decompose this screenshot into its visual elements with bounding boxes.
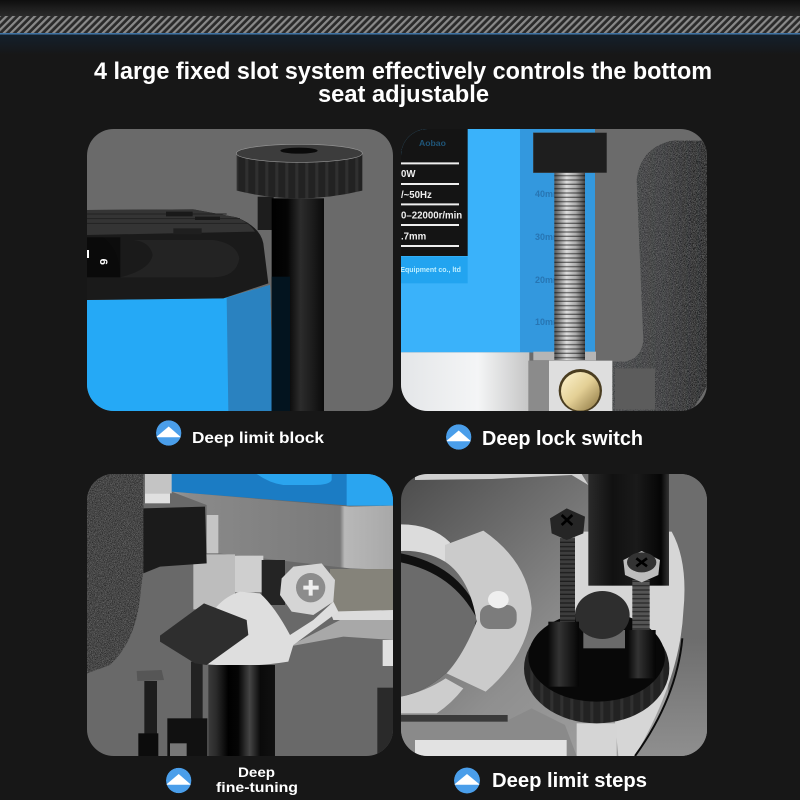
white strip bbox=[415, 474, 588, 485]
threaded screw bbox=[533, 172, 596, 360]
specification plate: /~50Hz bbox=[401, 190, 432, 201]
panel: deep limit block bbox=[87, 129, 393, 412]
blue body bbox=[170, 474, 393, 506]
specification plate: 0W bbox=[401, 169, 416, 180]
specification plate: Aobao bbox=[419, 138, 446, 148]
caption: deep limit steps: Deep limit steps bbox=[492, 770, 647, 792]
blue body bbox=[401, 129, 595, 352]
caption: deep fine-tuning: Deep bbox=[238, 765, 275, 780]
lock nut bbox=[280, 563, 335, 615]
specification plate: Equipment co., ltd bbox=[400, 267, 461, 274]
icon: blue circle with white triangle bbox=[166, 768, 191, 793]
locating pin bbox=[480, 591, 517, 629]
handle bbox=[612, 141, 707, 411]
depth scale: 10mm bbox=[535, 317, 561, 327]
handle bbox=[87, 474, 143, 673]
metal rail bbox=[145, 474, 172, 503]
black column bbox=[588, 474, 669, 586]
depth scale bbox=[535, 190, 554, 325]
icon: blue circle with white triangle bbox=[156, 420, 181, 446]
top decorative band bbox=[0, 0, 800, 55]
caption: deep lock switch bbox=[446, 424, 643, 450]
depth scale: 40mm bbox=[535, 189, 561, 199]
caption: deep limit block: Deep limit block bbox=[192, 430, 324, 447]
knob edge bbox=[377, 688, 393, 756]
black shaft bbox=[208, 665, 275, 756]
blue router body bbox=[87, 285, 273, 411]
knurled knob bbox=[236, 144, 362, 198]
silver housing bbox=[172, 492, 393, 570]
white base bbox=[401, 352, 529, 411]
left screw bbox=[548, 508, 585, 687]
specification plate: .7mm bbox=[401, 231, 426, 242]
lower right surface bbox=[636, 667, 707, 756]
depth scale: 20mm bbox=[535, 275, 561, 285]
caption: deep limit block bbox=[156, 420, 324, 447]
black tab bbox=[160, 603, 248, 665]
depth rod bbox=[258, 197, 324, 412]
adjusting screws bbox=[137, 662, 207, 756]
right screw bbox=[623, 551, 660, 678]
caption: deep fine-tuning bbox=[166, 765, 298, 795]
base foot bbox=[401, 708, 617, 756]
panel: deep limit steps bbox=[401, 474, 707, 756]
lower casting bbox=[193, 515, 393, 666]
lever and cone bbox=[208, 592, 338, 666]
knurled knob base bbox=[524, 591, 669, 723]
ring bracket bbox=[401, 524, 532, 713]
specification plate bbox=[400, 129, 468, 274]
black housing top bbox=[87, 209, 268, 300]
depth scale: 30mm bbox=[535, 232, 561, 242]
casting body bbox=[575, 532, 684, 756]
caption: deep fine-tuning: fine-tuning bbox=[216, 780, 298, 795]
curved black edge bbox=[635, 638, 682, 756]
specification plate: 0–22000r/min bbox=[401, 210, 462, 221]
caption: deep lock switch: Deep lock switch bbox=[482, 428, 643, 450]
title bbox=[94, 58, 712, 108]
caption: deep limit steps bbox=[454, 768, 647, 794]
title: seat adjustable bbox=[318, 81, 489, 108]
screw knob bbox=[533, 133, 607, 173]
metal block with brass button bbox=[528, 361, 612, 412]
panel: deep lock switch bbox=[400, 129, 707, 412]
panel: deep fine-tuning bbox=[87, 474, 393, 756]
black housing top: 6 bbox=[97, 259, 109, 265]
black connector bbox=[143, 507, 207, 573]
icon: blue circle with white triangle bbox=[446, 424, 471, 450]
icon: blue circle with white triangle bbox=[454, 768, 480, 794]
title: 4 large fixed slot system effectively controls the bottom bbox=[94, 58, 712, 85]
